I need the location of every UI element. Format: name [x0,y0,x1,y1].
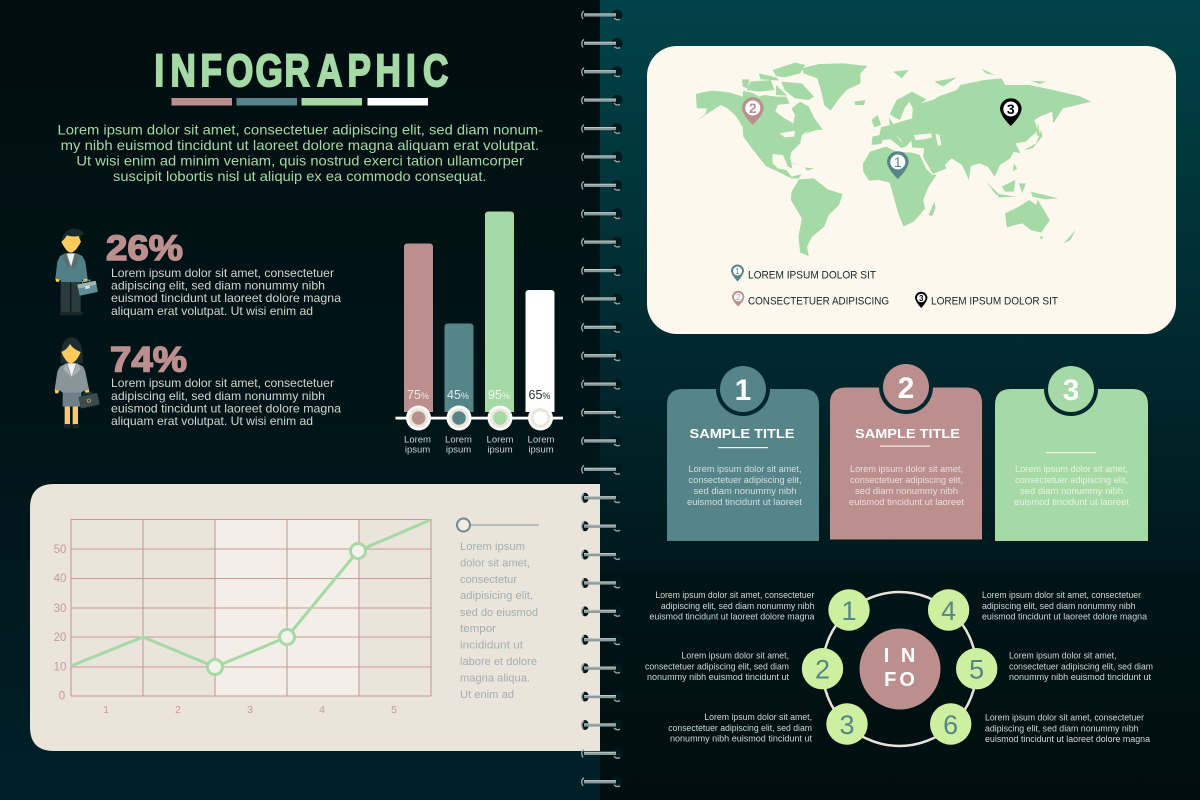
line chart: 40 [54,573,66,585]
ring text: items 4 to 6: euismod tincidunt ut laoreet dolore magna [985,734,1150,744]
text block: second stat description: euismod tincidunt ut laoreet dolore magna [111,402,341,416]
spiral binding [581,10,622,787]
panel: world map [647,46,1176,334]
text block: chart note [460,541,538,701]
text block: chart note: dolor sit amet, [460,558,530,570]
text block: chart note: adipisicing elit, [460,590,533,602]
panel: card 2: sed diam nonummy nibh [855,486,958,496]
text block: chart note: incididunt ut [460,640,523,652]
panel: card 2: euismod tincidunt ut laoreet [849,497,965,507]
bar chart: 95% [488,388,510,402]
text block: chart note: sed do eiusmod [460,607,538,619]
intro paragraph: my nibh euismod tincidunt ut laoreet dolore magna aliquam erat volutpat. [61,137,539,153]
ring text: items 4 to 6: euismod tincidunt ut laoreet dolore magna [982,612,1147,622]
line chart: 30 [54,603,66,615]
map legend: 3 [919,294,924,303]
ring text: items 4 to 6 [982,590,1153,744]
ring text: items 4 to 6: consectetuer adipiscing elit, sed diam [1009,662,1153,672]
text block: second stat description: adipiscing elit, sed diam nonummy nibh [111,389,325,403]
bar chart: 65% [528,388,550,402]
panel: card 2: consectetuer adipiscing elit, [850,475,963,485]
ring text: items 1 to 3: nonummy nibh euismod tincidunt ut [647,672,789,682]
bar chart: Lorem [445,434,472,446]
text block: first stat description: Lorem ipsum dolor sit amet, consectetuer [111,266,334,280]
bar chart: Lorem [528,434,555,446]
ring text: items 1 to 3: Lorem ipsum dolor sit amet, [704,712,812,722]
bar chart: ipsum [446,444,471,456]
map legend: LOREM IPSUM DOLOR SIT [931,296,1058,308]
panel: card 1: SAMPLE TITLE [690,426,795,441]
text block: chart note: consectetur [460,574,517,586]
line chart: 3 [247,704,253,716]
ring text: items 4 to 6: Lorem ipsum dolor sit amet, consectetuer [982,590,1141,600]
bar chart: 75% [407,388,429,402]
line chart: 0 [59,690,65,702]
icon: businesswoman [55,337,100,428]
panel: card 1: euismod tincidunt ut laoreet [687,497,803,507]
ring text: items 1 to 3: Lorem ipsum dolor sit amet, consectetuer [655,590,814,600]
ring text: items 4 to 6: adipiscing elit, sed diam nonummy nibh [982,601,1136,611]
text block: first stat description: euismod tincidunt ut laoreet dolore magna [111,291,341,305]
world map [696,63,1091,256]
text block: chart note: Lorem ipsum [460,541,525,553]
numbered nodes [802,589,997,745]
panel: card 1: 1 [735,374,751,407]
line chart [54,519,431,716]
bar chart: 45% [447,388,469,402]
bar chart: ipsum [528,444,554,456]
ring text: items 1 to 3: consectetuer adipiscing elit, sed diam [645,662,789,672]
map pin 3 [1000,98,1022,126]
text block: second stat description: aliquam erat volutpat. Ut wisi enim ad [111,414,313,428]
intro paragraph: Ut wisi enim ad minim veniam, quis nostrud exerci tation ullamcorper [76,152,524,168]
intro paragraph: Lorem ipsum dolor sit amet, consectetuer adipiscing elit, sed diam nonum- [58,122,543,138]
bar chart: Lorem [404,434,431,446]
text block: first stat description: adipiscing elit, sed diam nonummy nibh [111,278,325,292]
panel: card 3 [995,362,1148,541]
panel: card 1 [667,362,819,541]
ring text: items 1 to 3 [645,590,814,744]
numbered nodes: 4 [941,596,956,626]
numbered nodes: 6 [943,710,958,740]
ring text: items 4 to 6: adipiscing elit, sed diam nonummy nibh [985,724,1138,734]
panel: card 2 [830,360,982,540]
panel: card 3: 3 [1063,374,1079,407]
map legend: CONSECTETUER ADIPISCING [748,296,889,308]
bar chart: ipsum [405,444,430,456]
title colour bars [172,98,428,106]
text block: second stat description: Lorem ipsum dolor sit amet, consectetuer [111,376,334,390]
text block: chart note: Ut enim ad [460,689,514,701]
title: INFOGRAPHIC [154,45,448,96]
map pin 2 [742,97,764,125]
map pin 2: 2 [749,100,757,116]
intro paragraph: suscipit lobortis nisl ut aliquip ex ea commodo consequat. [113,168,486,184]
line chart: 50 [54,544,66,556]
centre circle: FO [884,669,918,691]
centre circle [860,628,940,710]
text block: chart note: magna aliqua. [460,672,530,684]
numbered nodes: 5 [969,654,984,684]
numbered nodes: 2 [815,654,830,684]
bar chart [396,212,563,456]
centre circle: I N [884,645,918,667]
ring text: items 4 to 6: Lorem ipsum dolor sit amet, consectetuer [985,712,1144,722]
numbered nodes: 1 [841,596,857,626]
map pin 1: 1 [894,154,902,170]
icon: businessman [55,228,98,315]
map pin 3: 3 [1007,101,1015,117]
chart legend marker [457,518,539,532]
line chart: 2 [175,704,181,716]
panel: card 3: consectetuer adipiscing elit, [1015,475,1128,485]
panel: card 2: 2 [898,372,914,405]
panel: line chart [30,484,600,751]
ring text: items 1 to 3: nonummy nibh euismod tincidunt ut [670,734,812,744]
ring text: items 1 to 3: Lorem ipsum dolor sit amet, [682,650,789,660]
stat: 74%: 74% [110,340,187,380]
ring text: items 4 to 6: nonummy nibh euismod tincidunt ut [1009,672,1151,682]
panel: card 3: Lorem ipsum dolor sit amet, [1015,464,1128,474]
line chart: 5 [391,704,397,716]
stat: 26%: 26% [106,229,183,268]
line chart: 4 [319,704,325,716]
bar chart: Lorem [487,434,514,446]
map pin 1 [887,151,909,179]
background: right page [600,0,1200,800]
map legend: 1 [735,267,740,276]
text block: first stat description [111,266,341,318]
panel: card 3: euismod tincidunt ut laoreet [1014,497,1130,507]
line chart: 20 [54,632,66,644]
text block: first stat description: aliquam erat volutpat. Ut wisi enim ad [111,304,313,318]
panel: card 3: sed diam nonummy nibh [1020,486,1123,496]
panel: card 2: SAMPLE TITLE [855,426,960,441]
line chart: 10 [54,662,66,674]
background: left page [0,0,600,800]
line chart: 1 [103,704,109,716]
text block: second stat description [111,376,341,428]
intro paragraph [58,122,543,184]
panel: card 1: Lorem ipsum dolor sit amet, [688,464,802,474]
ring text: items 1 to 3: euismod tincidunt ut laoreet dolore magna [649,612,814,622]
ring text: items 1 to 3: consectetuer adipiscing elit, sed diam [668,723,812,733]
panel: card 1: sed diam nonummy nibh [694,486,796,496]
map legend [731,265,1058,308]
panel: card 2: Lorem ipsum dolor sit amet, [850,464,963,474]
map legend: 2 [736,293,741,302]
map legend: LOREM IPSUM DOLOR SIT [748,270,876,282]
bar chart: ipsum [487,444,513,456]
panel: card 1: consectetuer adipiscing elit, [688,475,802,485]
ring text: items 4 to 6: Lorem ipsum dolor sit amet, [1009,650,1116,660]
ring text: items 1 to 3: adipiscing elit, sed diam nonummy nibh [661,601,814,611]
text block: chart note: tempor [460,623,496,635]
numbered nodes: 3 [839,710,855,740]
ring diagram [802,589,997,746]
text block: chart note: labore et dolore [460,656,537,668]
